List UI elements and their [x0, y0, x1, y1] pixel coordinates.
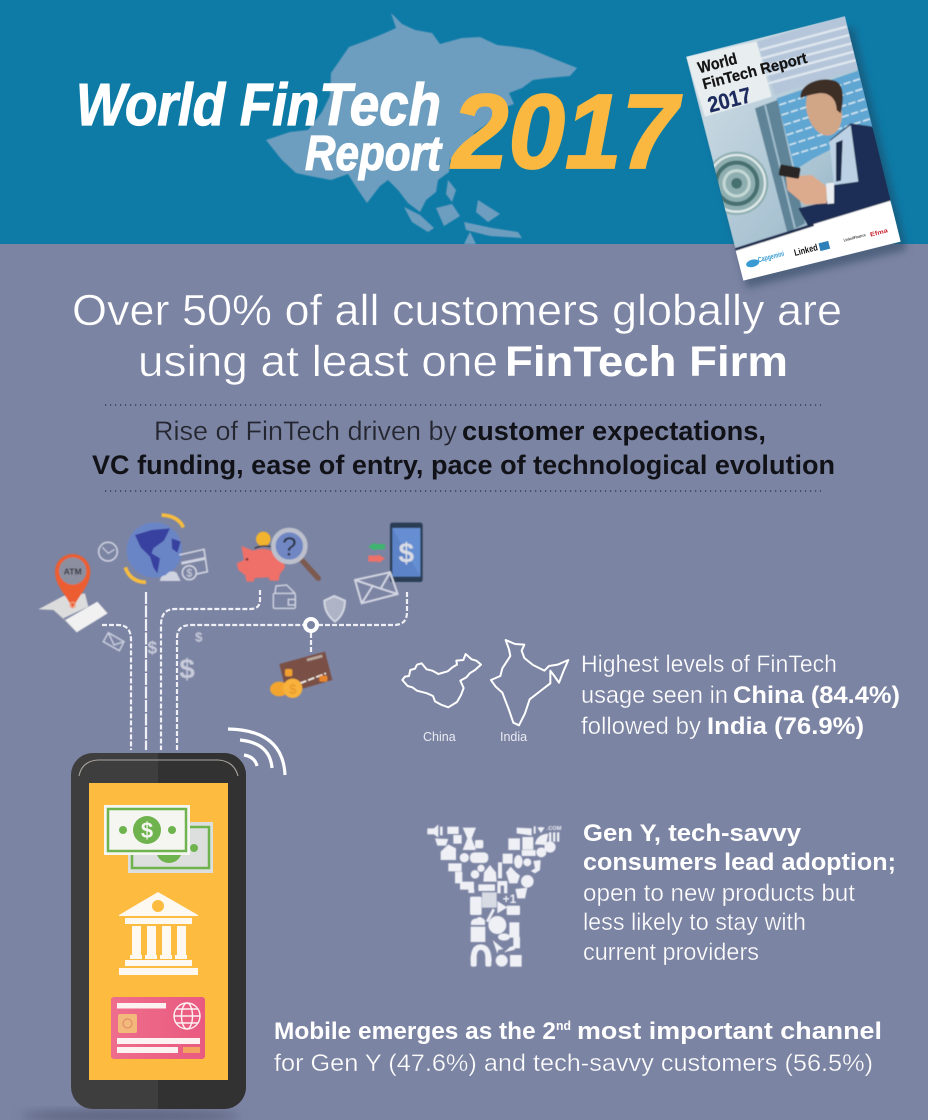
text: highest levels of FinTech usage: Highest levels of FinTech — [581, 651, 837, 678]
text: highest levels of FinTech usage — [581, 651, 900, 740]
dotted divider bottom — [105, 490, 821, 492]
text: mobile channel: most important channel — [577, 1018, 882, 1045]
icon: card, coin and cloud: $ — [186, 568, 192, 580]
text: Gen Y: current providers — [583, 939, 759, 966]
cover logos: Capgemini — [757, 249, 785, 264]
icon: shield — [324, 596, 345, 622]
icon: smartphone with dollar: $ — [399, 538, 415, 569]
title: World FinTech Report: Report — [305, 127, 442, 181]
cover: swirl — [713, 151, 768, 216]
headline: using at least one — [138, 338, 498, 386]
dollar signs: $ — [195, 630, 203, 645]
subheading: Rise of FinTech driven by — [154, 416, 458, 446]
text: Gen Y: open to new products but — [583, 880, 855, 907]
icon: wifi signal — [228, 729, 285, 775]
text: Gen Y — [583, 820, 896, 966]
map of Asia — [266, 13, 577, 244]
text: mobile channel — [274, 1018, 882, 1077]
cover title — [696, 50, 809, 118]
cover title: World — [696, 51, 739, 77]
map labels: India — [500, 730, 527, 744]
subheading: VC funding, ease of entry, pace of technological evolution — [92, 450, 835, 480]
cover title: 2017 — [705, 82, 754, 118]
icon: letter Y made of small icons — [427, 824, 562, 967]
subheading: customer expectations, — [462, 416, 766, 446]
text: mobile channel: nd — [556, 1018, 571, 1033]
cover: businessman — [779, 79, 893, 227]
phone screen — [89, 783, 228, 1080]
title: year 2017: 2017 — [450, 73, 683, 191]
text: highest levels of FinTech usage: followed by — [581, 713, 702, 740]
cover logos: Efma — [870, 228, 889, 239]
icon: clock — [99, 542, 117, 561]
cover logos: Linked — [793, 242, 819, 258]
top icon cluster — [38, 515, 423, 698]
title: World FinTech Report — [76, 72, 442, 181]
text: mobile channel: Mobile emerges as the 2 — [274, 1018, 556, 1045]
headline: FinTech Firm — [505, 338, 788, 386]
cover title: FinTech Report — [701, 50, 809, 93]
map: India outline — [491, 640, 568, 725]
map labels: China — [423, 730, 456, 744]
icon: piggy bank — [237, 532, 285, 582]
dollar signs: $ — [179, 653, 195, 684]
dollar signs — [148, 630, 203, 684]
icon: envelope — [355, 572, 398, 603]
map: China outline — [402, 654, 481, 707]
icon: wallet — [273, 585, 295, 608]
smartphone — [20, 753, 246, 1120]
text: highest levels of FinTech usage: China (84.4%) — [733, 682, 900, 709]
icon: credit card and coins — [270, 652, 332, 698]
map labels — [423, 730, 527, 744]
cover: tower — [755, 100, 805, 233]
icon: magnifying glass — [273, 530, 318, 578]
icon: letter Y made of small icons: +1 — [503, 892, 517, 906]
dashed connector lines — [102, 590, 407, 750]
headline: Over 50% of all customers globally are — [72, 287, 842, 335]
icon: credit card and coins: $ — [289, 681, 297, 696]
cover: blue building tiles — [777, 70, 875, 170]
icon: pink credit card — [111, 997, 205, 1059]
text: Gen Y: Gen Y, tech-savvy — [583, 820, 801, 847]
icon: card, coin and cloud — [160, 549, 207, 581]
icon: banknotes: $ — [141, 818, 153, 843]
dollar signs: $ — [148, 637, 158, 657]
cover logos — [745, 228, 889, 269]
icon: magnifying glass: ? — [282, 531, 297, 561]
title: World FinTech Report: World FinTech — [76, 72, 441, 138]
icon: ATM pin: ATM — [64, 566, 82, 576]
text: Gen Y: less likely to stay with — [583, 909, 806, 936]
icon: ATM pin — [55, 554, 90, 608]
icon: globe — [125, 515, 183, 582]
cover: white footer — [733, 201, 903, 283]
subheading — [92, 416, 835, 480]
connector node — [305, 619, 317, 631]
text: Gen Y: consumers lead adoption; — [583, 849, 896, 876]
text: mobile channel: for Gen Y (47.6%) and tech-savvy customers (56.5%) — [274, 1050, 873, 1077]
headline — [72, 287, 842, 386]
icon: transfer arrows — [368, 542, 385, 563]
icon: small envelope — [103, 633, 124, 651]
text: highest levels of FinTech usage: India (76.9%) — [707, 713, 864, 740]
icon: banknotes — [104, 805, 213, 873]
report cover — [686, 16, 907, 288]
icon: folded map — [38, 593, 108, 632]
icon: bank building — [119, 892, 198, 975]
text: highest levels of FinTech usage: usage seen in — [581, 682, 728, 709]
dotted divider top — [105, 404, 821, 406]
header band — [0, 0, 928, 244]
cover logos: LinkedFinance — [843, 232, 867, 243]
icon: letter Y made of small icons: .COM — [547, 826, 562, 832]
cover: striped facade — [757, 16, 858, 95]
icon: smartphone with dollar — [390, 523, 423, 582]
